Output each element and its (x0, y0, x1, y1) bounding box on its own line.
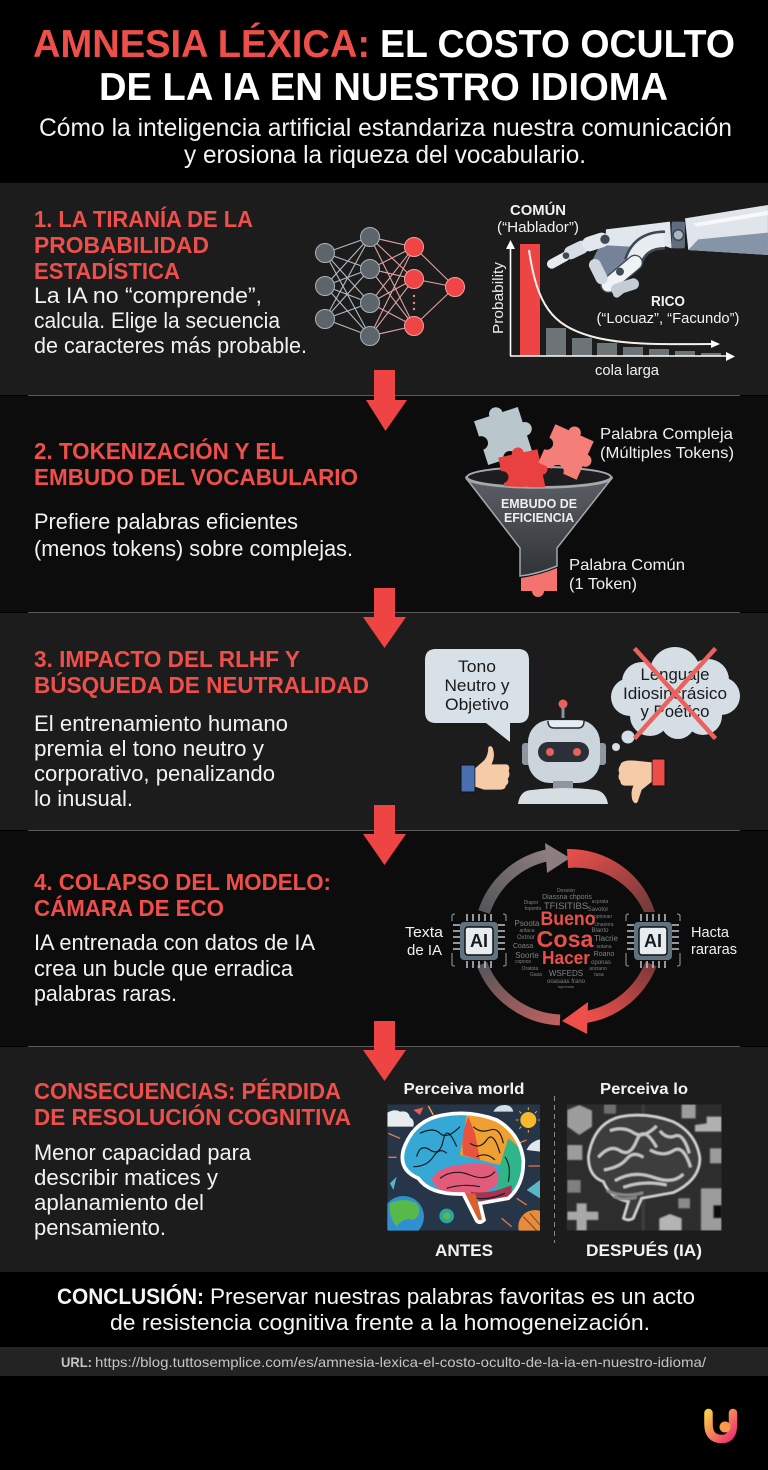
icon: robot hand (552, 205, 768, 294)
heading 3 (34, 646, 369, 698)
word cloud: toponto (525, 906, 542, 912)
label: texta de IA (405, 924, 444, 959)
word cloud: ooasaas frano (547, 979, 586, 985)
heading 2 (34, 437, 358, 490)
conclusion: Preservar nuestras palabras favoritas es un acto (210, 1284, 695, 1309)
word cloud: Oratota (522, 966, 539, 972)
heading 1: 1. LA TIRANÍA DE LA (34, 205, 253, 232)
icon: thumbs up (461, 746, 510, 792)
heading 3: BÚSQUEDA DE NEUTRALIDAD (34, 671, 369, 698)
heading 4: 4. COLAPSO DEL MODELO: (34, 869, 331, 895)
word cloud: Blanto (591, 928, 609, 934)
title (33, 22, 735, 109)
body 5: describir matices y (34, 1165, 218, 1190)
label: texta de IA: Texta (405, 924, 444, 941)
icon: AI chip left: AI (470, 931, 488, 951)
word cloud: oponas (591, 960, 611, 966)
label: palabra común (569, 557, 685, 593)
divider 4 (28, 1046, 740, 1048)
label: palabra común: Palabra Común (569, 557, 685, 574)
heading 1 (34, 205, 253, 284)
word cloud: sotana (596, 944, 612, 950)
word cloud: Savotor (588, 907, 608, 913)
thought cloud: lenguaje idiosincrásico crossed out: Idiosincrásico (623, 684, 727, 703)
body 5: pensamiento. (34, 1215, 166, 1240)
chart: long tail probability: RICO (651, 293, 685, 310)
word cloud: Cosa (536, 926, 594, 952)
conclusion: de resistencia cognitiva frente a la homogeneización. (110, 1310, 650, 1335)
label: antes: ANTES (435, 1241, 493, 1260)
body 4 (34, 930, 315, 1006)
body 3: El entrenamiento humano (34, 711, 288, 736)
body 3 (34, 711, 288, 811)
url bar: https://blog.tuttosemplice.com/es/amnesia-lexica-el-costo-oculto-de-la-ia-en-nuestro-idioma/ (95, 1354, 706, 1370)
chart: long tail probability (490, 201, 740, 379)
title: DE LA IA EN NUESTRO IDIOMA (99, 66, 668, 109)
chart: long tail probability: Probability (490, 261, 507, 334)
word cloud (513, 888, 619, 989)
header (33, 22, 735, 169)
thought cloud: lenguaje idiosincrásico crossed out: y Poético (640, 702, 710, 721)
chart: long tail probability: (“Hablador”) (497, 219, 579, 236)
heading 1: ESTADÍSTICA (34, 257, 180, 284)
word cloud: Diapor (524, 900, 539, 906)
word cloud: toponoas (558, 984, 574, 989)
heading 5: DE RESOLUCIÓN COGNITIVA (34, 1103, 351, 1130)
heading 2: 2. TOKENIZACIÓN Y EL (34, 437, 284, 464)
icon: thumbs down (618, 759, 665, 804)
panel 3: RLHF (0, 613, 768, 830)
label: perceiva lo: Perceiva lo (600, 1081, 688, 1098)
heading 1: PROBABILIDAD (34, 232, 209, 258)
speech bubble: tono neutro: Objetivo (445, 695, 509, 714)
label: palabra común: (1 Token) (569, 576, 637, 593)
body 5: aplanamiento del (34, 1190, 204, 1215)
speech bubble: tono neutro: Neutro y (444, 676, 510, 695)
heading 5 (34, 1077, 351, 1130)
body 1: calcula. Elige la secuencia (34, 308, 281, 333)
word cloud: Coasa (513, 943, 533, 950)
body 1: de caracteres más probable. (34, 333, 307, 358)
label: después: DESPUÉS (IA) (586, 1241, 702, 1260)
icon: funnel with puzzle pieces (466, 398, 612, 597)
cycle arrows (482, 843, 655, 1034)
heading 2: EMBUDO DEL VOCABULARIO (34, 464, 358, 490)
image: colourful brain (antes) (387, 1104, 540, 1231)
word cloud: WSFEDS (549, 969, 583, 978)
label: hacta rararas: Hacta (691, 924, 730, 941)
icon: funnel with puzzle pieces: EFICIENCIA (504, 510, 575, 525)
icon: AI chip left (452, 914, 506, 968)
heading 4 (34, 869, 331, 921)
word cloud: TFISITIBS (544, 901, 588, 912)
word cloud: Bueno (540, 909, 596, 930)
word cloud: acprata (592, 899, 609, 905)
label: hacta rararas: rararas (691, 941, 737, 958)
word cloud: Hacer (542, 948, 590, 968)
chart: long tail probability: COMÚN (510, 201, 566, 219)
arrow 2 (363, 588, 406, 648)
speech bubble: tono neutro: Tono (458, 657, 496, 676)
body 3: corporativo, penalizando (34, 761, 275, 786)
body 1 (34, 283, 307, 358)
icon: robot (518, 700, 608, 804)
body 4: palabras raras. (34, 981, 177, 1006)
arrow 3 (363, 805, 406, 865)
body 3: premia el tono neutro y (34, 736, 264, 761)
word cloud: Gasa (530, 972, 542, 978)
word cloud: tusa (594, 972, 604, 978)
icon: AI chip right (626, 914, 680, 968)
subtitle (39, 114, 732, 169)
label: texta de IA: de IA (407, 942, 442, 959)
panel 1: probabilidad estadística (0, 183, 768, 395)
divider 1 (28, 394, 740, 396)
heading 5: CONSECUENCIAS: PÉRDIDA (34, 1077, 341, 1104)
word cloud: Diassna chporis (542, 894, 592, 901)
word cloud: Unanora (594, 922, 614, 928)
divider 3 (28, 830, 740, 832)
panel 2: tokenización (0, 396, 768, 612)
body 5: Menor capacidad para (34, 1140, 252, 1165)
arrow 1 (366, 370, 407, 431)
panel 5: consecuencias (0, 1047, 768, 1272)
conclusion (0, 1272, 768, 1347)
word cloud: optonan (594, 914, 612, 920)
icon: logo (708, 1413, 733, 1439)
word cloud: aritaca (519, 928, 535, 934)
body 5 (34, 1140, 252, 1240)
label: palabra compleja: Palabra Compleja (600, 426, 733, 443)
url bar: URL: (61, 1354, 92, 1370)
heading 4: CÁMARA DE ECO (34, 894, 224, 921)
body 4: crea un bucle que erradica (34, 956, 294, 981)
panel 4: colapso del modelo (0, 831, 768, 1046)
icon: AI chip right: AI (644, 931, 662, 951)
word cloud: Soorte (515, 951, 539, 960)
word cloud: Dexsion (557, 888, 575, 894)
body 3: lo inusual. (34, 786, 133, 811)
body 2: (menos tokens) sobre complejas. (34, 536, 353, 561)
subtitle: y erosiona la riqueza del vocabulario. (184, 141, 586, 169)
speech bubble: tono neutro (425, 649, 529, 742)
word cloud: copoos (515, 959, 532, 965)
subtitle: Cómo la inteligencia artificial estandariza nuestra comunicación (39, 114, 732, 142)
dashed separator (554, 1096, 556, 1243)
title: AMNESIA LÉXICA: (33, 22, 370, 66)
body 1: La IA no “comprende”, (34, 283, 262, 308)
icon: funnel with puzzle pieces: EMBUDO DE (501, 496, 577, 511)
chart: long tail probability: (“Locuaz”, “Facundo”) (596, 310, 740, 327)
thought cloud: lenguaje idiosincrásico crossed out: Lenguaje (640, 665, 710, 684)
word cloud: Roano (594, 951, 614, 958)
body 2 (34, 509, 353, 561)
label: hacta rararas (691, 924, 737, 958)
thought cloud: lenguaje idiosincrásico crossed out (611, 647, 740, 751)
word cloud: Tlacrie (594, 934, 619, 943)
word cloud: Oxtnor (517, 935, 535, 941)
conclusion: CONCLUSIÓN: (57, 1284, 204, 1309)
chart: long tail probability: cola larga (595, 362, 660, 379)
word cloud: aociano (589, 966, 607, 972)
image: grey brain (después) (567, 1104, 722, 1231)
label: palabra compleja: (Múltiples Tokens) (600, 445, 734, 462)
body 4: IA entrenada con datos de IA (34, 930, 315, 955)
body 2: Prefiere palabras eficientes (34, 509, 298, 534)
url bar (0, 1347, 768, 1376)
label: palabra compleja (600, 426, 734, 462)
word cloud: Psoota (515, 919, 540, 928)
label: perceiva morld: Perceiva morld (404, 1081, 524, 1098)
title: EL COSTO OCULTO (380, 23, 735, 66)
arrow 4 (363, 1021, 406, 1081)
icon: neural network (316, 228, 464, 346)
heading 3: 3. IMPACTO DEL RLHF Y (34, 646, 300, 672)
divider 2 (28, 612, 740, 614)
